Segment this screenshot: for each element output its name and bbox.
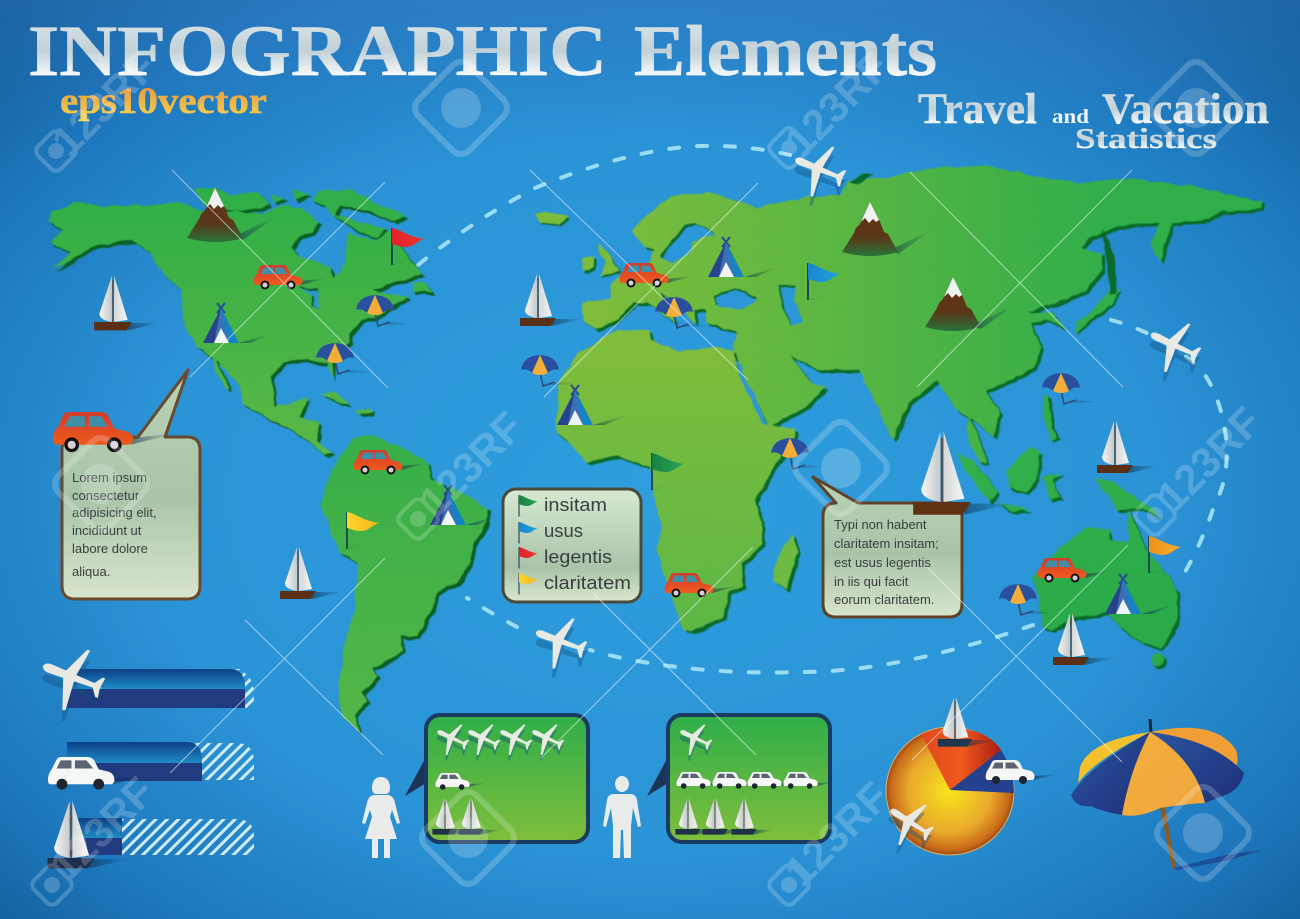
icon: man [603, 776, 641, 858]
watermark: 123RF stamps: 123RF [43, 43, 165, 165]
panel: woman's trips [405, 715, 588, 842]
callout: typi non habent [813, 477, 962, 617]
callout: lorem ipsum: adipisicing elit, [72, 505, 157, 520]
callout: lorem ipsum: Lorem ipsum [72, 470, 147, 485]
callout: lorem ipsum: aliqua. [72, 564, 110, 579]
heading: travel and vacation statistics: and [1052, 106, 1089, 128]
icons: red cars [254, 263, 1112, 598]
icons: flags [346, 228, 1181, 573]
world map [48, 165, 1265, 735]
bar: car [48, 742, 254, 790]
icons: beach umbrellas [316, 295, 1095, 615]
callout: typi non habent: est usus legentis [834, 555, 931, 570]
callout: lorem ipsum [62, 370, 200, 599]
title: Elements [634, 11, 937, 91]
statistics: man [603, 715, 836, 858]
subtitle: eps10vector: eps10vector [60, 81, 267, 122]
callout: lorem ipsum: consectetur [72, 488, 140, 503]
bar chart: plane, car, boat [27, 637, 254, 868]
australia and islands [957, 447, 1180, 670]
icons: tents [203, 237, 1175, 614]
south america [322, 435, 491, 735]
north america [48, 187, 436, 458]
callout: typi non habent: claritatem insitam; [834, 536, 939, 551]
heading: travel and vacation statistics: Vacation [1102, 86, 1269, 133]
title: INFOGRAPHIC [28, 11, 607, 91]
icon: woman [362, 777, 400, 858]
icon: large sailboat [913, 432, 1012, 515]
icons: mountains [187, 188, 1015, 331]
dashed flight route [397, 146, 1227, 673]
legend: claritatem [544, 573, 631, 593]
title [28, 11, 937, 91]
watermark: 123RF stamps: 123RF [410, 403, 532, 525]
heading: travel and vacation statistics: Travel [918, 86, 1037, 133]
callout: typi non habent: in iis qui facit [834, 574, 909, 589]
pie chart [873, 697, 1060, 864]
icon: large beach umbrella [1071, 719, 1262, 870]
watermark: 123RF stamps: 123RF [776, 43, 898, 165]
legend: insitam [544, 495, 607, 515]
legend [503, 489, 641, 602]
statistics: woman [362, 715, 588, 858]
icons: sailboats [94, 274, 1159, 665]
callout: typi non habent: Typi non habent [834, 517, 927, 532]
callout: lorem ipsum: incididunt ut [72, 523, 142, 538]
watermark: 123RF stamps: 123RF [41, 768, 163, 890]
bar: plane [27, 637, 254, 732]
africa [556, 330, 800, 635]
watermark: 123RF stamps: 123RF [776, 773, 898, 895]
watermark lines [170, 170, 1132, 773]
eurasia [534, 165, 1265, 465]
legend: legentis [544, 547, 612, 567]
callout: typi non habent: eorum claritatem. [834, 592, 934, 607]
icon: large red car [53, 412, 175, 452]
icons: flying planes [523, 136, 1212, 686]
callout: lorem ipsum: labore dolore [72, 541, 148, 556]
legend: usus [544, 521, 583, 541]
heading: travel and vacation statistics: Statistics [1075, 124, 1217, 155]
watermark: 123RF stamps: 123RF [1148, 398, 1270, 520]
panel: man's trips [647, 715, 836, 842]
heading: travel and vacation statistics [918, 86, 1269, 155]
bar: boat [48, 801, 254, 868]
